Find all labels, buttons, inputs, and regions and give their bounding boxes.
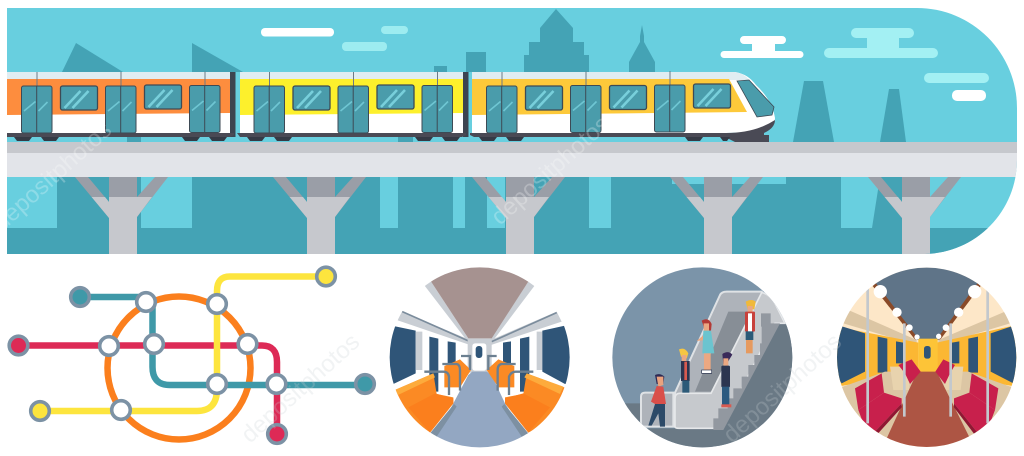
panel: elevated train scene xyxy=(7,8,1017,254)
watermarks: depositphotos xyxy=(486,110,615,230)
skyline buildings xyxy=(7,9,1017,254)
metro map xyxy=(9,267,374,443)
watermarks xyxy=(0,110,847,448)
yellow line xyxy=(40,276,326,411)
interchange stations xyxy=(100,293,286,419)
train couplers xyxy=(230,72,468,137)
clouds xyxy=(261,26,989,101)
person: red shirt xyxy=(648,374,666,427)
watermarks: depositphotos xyxy=(718,328,847,448)
teal line xyxy=(80,297,365,385)
back balustrade xyxy=(675,292,782,427)
circle: orange seat carriage interior xyxy=(390,267,570,448)
viaduct pillars xyxy=(75,177,961,254)
person: teal dress xyxy=(697,319,714,373)
red line xyxy=(18,346,277,434)
windshield xyxy=(737,80,774,117)
ceiling lamps xyxy=(874,285,981,340)
terminal stations xyxy=(9,267,374,443)
car: yellow xyxy=(237,72,466,141)
person: top of escalator xyxy=(745,300,756,353)
circle: red seat retro carriage interior xyxy=(837,268,1016,447)
front balustrade xyxy=(641,393,673,427)
car: orange xyxy=(7,72,234,141)
car: locomotive with nose xyxy=(470,71,775,142)
orange ring line xyxy=(108,296,250,440)
watermarks: depositphotos xyxy=(236,328,365,448)
person: blond man xyxy=(679,349,690,393)
circle: escalator with passengers xyxy=(612,267,792,448)
train xyxy=(7,71,775,142)
person: dark jacket xyxy=(721,352,732,407)
viaduct deck xyxy=(7,142,1017,177)
